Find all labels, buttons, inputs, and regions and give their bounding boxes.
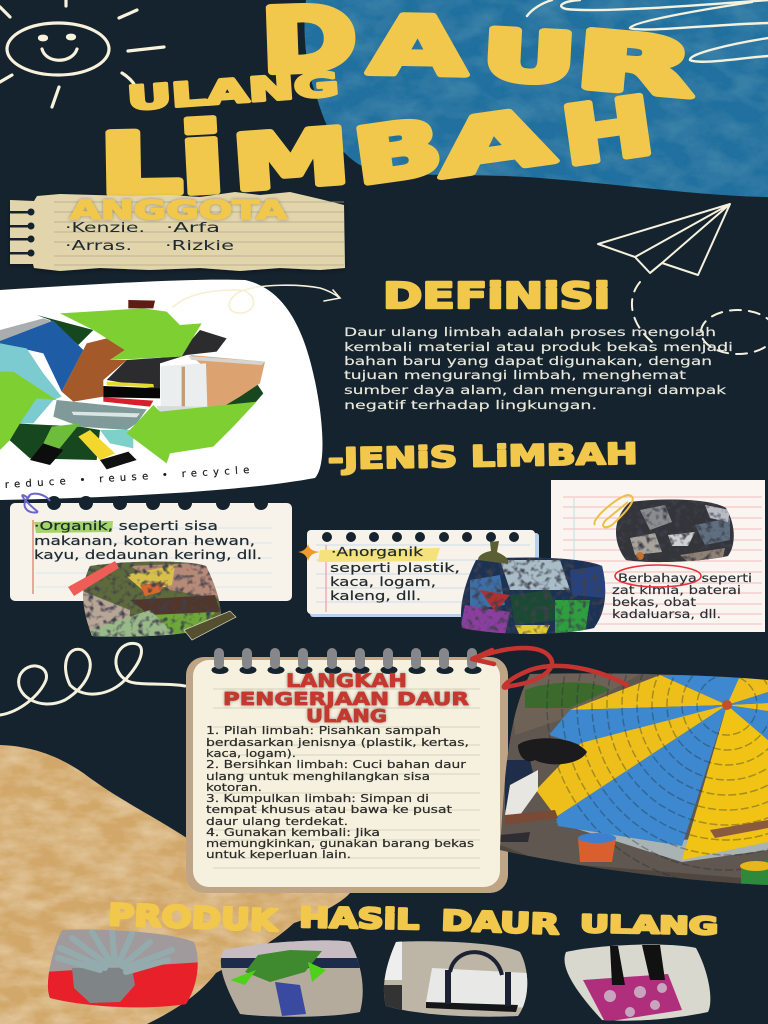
text: berbahaya (612, 571, 752, 621)
title: Daur Ulang Limbah: B (348, 101, 448, 202)
text: berbahaya: bekas, obat (612, 595, 697, 609)
bucket (578, 833, 616, 862)
title: Daur Ulang Limbah: ULANG (126, 64, 340, 118)
title: Daur Ulang Limbah: i (174, 102, 230, 218)
title: Daur Ulang Limbah: A (368, 0, 467, 94)
text: organik: kayu, dedaunan kering, dll. (34, 547, 262, 562)
text: steps: kotoran. (206, 782, 262, 794)
heading: langkah pengerjaan daur ulang: ULANG (306, 706, 387, 727)
member names: ·Arfa (166, 221, 220, 236)
title: Daur Ulang Limbah: H (556, 79, 660, 184)
text: steps: ulang untuk menghilangkan sisa (206, 771, 430, 783)
text: steps: 2. Bersihkan limbah: Cuci bahan daur (206, 759, 467, 771)
panel: organik card (10, 494, 292, 640)
icon: smiling sun (0, 0, 164, 107)
text: organik: makanan, kotoran hewan, (34, 533, 255, 548)
photo: recycled turtle (220, 940, 363, 1017)
title: Daur Ulang Limbah (99, 0, 698, 218)
heading: langkah pengerjaan daur ulang: LANGKAH (286, 670, 407, 692)
panel: berbahaya paper (551, 480, 765, 632)
text: definisi body (344, 325, 733, 412)
heading: definisi: DEFiNiSi (383, 276, 610, 317)
heading: langkah pengerjaan daur ulang: PENGERJAAN DAUR (223, 689, 469, 710)
text: organik: ·Organik, seperti sisa (34, 518, 218, 533)
member names (65, 221, 234, 254)
icon: paper plane (598, 204, 730, 275)
title: Daur Ulang Limbah: L (99, 115, 182, 214)
text: steps: tempat khusus atau bawa ke pusat (206, 804, 452, 816)
panel: anorganik card (298, 530, 539, 617)
text: steps: memungkinkan, gunakan barang bekas (206, 838, 474, 850)
text: anorganik: kaca, logam, (330, 574, 436, 589)
person (500, 738, 587, 842)
text: definisi body: bahan baru yang dapat digunakan, dengan (344, 354, 712, 368)
text: anorganik: kaleng, dll. (330, 588, 421, 603)
tape: red (68, 561, 119, 596)
panel: recycling image on white blob (0, 280, 322, 500)
text: berbahaya: Berbahaya seperti (618, 571, 752, 585)
photo: whiskas pouch bag (564, 944, 710, 1021)
text: anorganik: seperti plastik, (330, 560, 460, 575)
icon: olive push pin (478, 541, 509, 564)
text: definisi body: Daur ulang limbah adalah proses mengolah (344, 325, 716, 339)
crumpled blue paper shape (304, 0, 768, 197)
text: steps (206, 725, 474, 861)
title: Daur Ulang Limbah: M (229, 111, 353, 208)
decorative loop squiggle (0, 643, 185, 715)
text: steps: kaca, logam). (206, 748, 296, 760)
member names: ·Arras. (65, 239, 132, 254)
text: anorganik (330, 544, 460, 603)
heading: produk hasil daur ulang: HASiL (299, 901, 420, 936)
title: Daur Ulang Limbah: U (481, 16, 577, 100)
icon: paperclip (594, 495, 633, 527)
notebook rings (212, 648, 482, 674)
text: definisi body: sumber daya alam, dan mengurangi dampak (344, 383, 726, 397)
photo: organic waste (83, 562, 222, 637)
text: definisi body: negatif terhadap lingkungan. (344, 398, 597, 412)
text: steps: daur ulang terdekat. (206, 816, 348, 828)
heading: produk hasil daur ulang: ULANG (580, 910, 718, 940)
heading: produk hasil daur ulang: DAUR (441, 904, 560, 941)
heading: produk hasil daur ulang: PRODUK (108, 898, 280, 939)
text: berbahaya: zat kimia, baterai (612, 583, 741, 597)
tape: olive (184, 611, 236, 640)
member names: ·Rizkie (165, 239, 234, 254)
photo: plastic waste (460, 558, 606, 634)
text: definisi body: tujuan mengurangi limbah, menghemat (344, 368, 687, 382)
photo: recycled bottle umbrella (500, 673, 768, 885)
text: berbahaya: kadaluarsa, dll. (612, 607, 721, 621)
text: steps: untuk keperluan lain. (206, 849, 351, 861)
photo: e-waste pile (616, 500, 734, 562)
text: steps: 4. Gunakan kembali: Jika (206, 827, 380, 839)
icon: purple heart doodle (22, 494, 50, 513)
highlight: anorganik (318, 548, 440, 562)
arrow: to definisi (173, 285, 340, 313)
heading: langkah pengerjaan daur ulang (223, 670, 469, 727)
caption: reduce reuse recycle: reduce • reuse • recycle (5, 465, 250, 491)
highlight: red circle (615, 565, 701, 587)
heading: jenis limbah: -JENiS LiMBAH (328, 437, 638, 476)
highlight: organik (34, 521, 113, 533)
heading: anggota: ANGGOTA (70, 196, 287, 226)
text: steps: 1. Pilah limbah: Pisahkan sampah (206, 725, 441, 737)
title: Daur Ulang Limbah: R (572, 15, 698, 115)
text: anorganik: ·Anorganik (331, 544, 424, 559)
panel: anggota torn paper (10, 192, 345, 271)
heading: produk hasil daur ulang (108, 898, 718, 941)
photo: origami pineapple (48, 930, 198, 1008)
sand paper area (0, 745, 350, 1024)
member names: ·Kenzie. (65, 221, 145, 236)
arrow: red curl (472, 648, 627, 688)
text: organik (34, 518, 262, 562)
icon: orange sparkle (298, 544, 320, 561)
panel: langkah notebook (186, 648, 508, 893)
text: steps: 3. Kumpulkan limbah: Simpan di (206, 793, 429, 805)
decorative dashed swirl (632, 282, 768, 354)
text: steps: berdasarkan jenisnya (plastik, kertas, (206, 737, 469, 749)
umbrella wedges (537, 674, 768, 878)
title: Daur Ulang Limbah: A (432, 91, 558, 195)
second bucket and arm (710, 820, 768, 886)
text: definisi body: kembali material atau produk bekas menjadi (344, 340, 733, 354)
photo: recycled tote bag (384, 941, 528, 1017)
white scribble top right (527, 0, 768, 62)
